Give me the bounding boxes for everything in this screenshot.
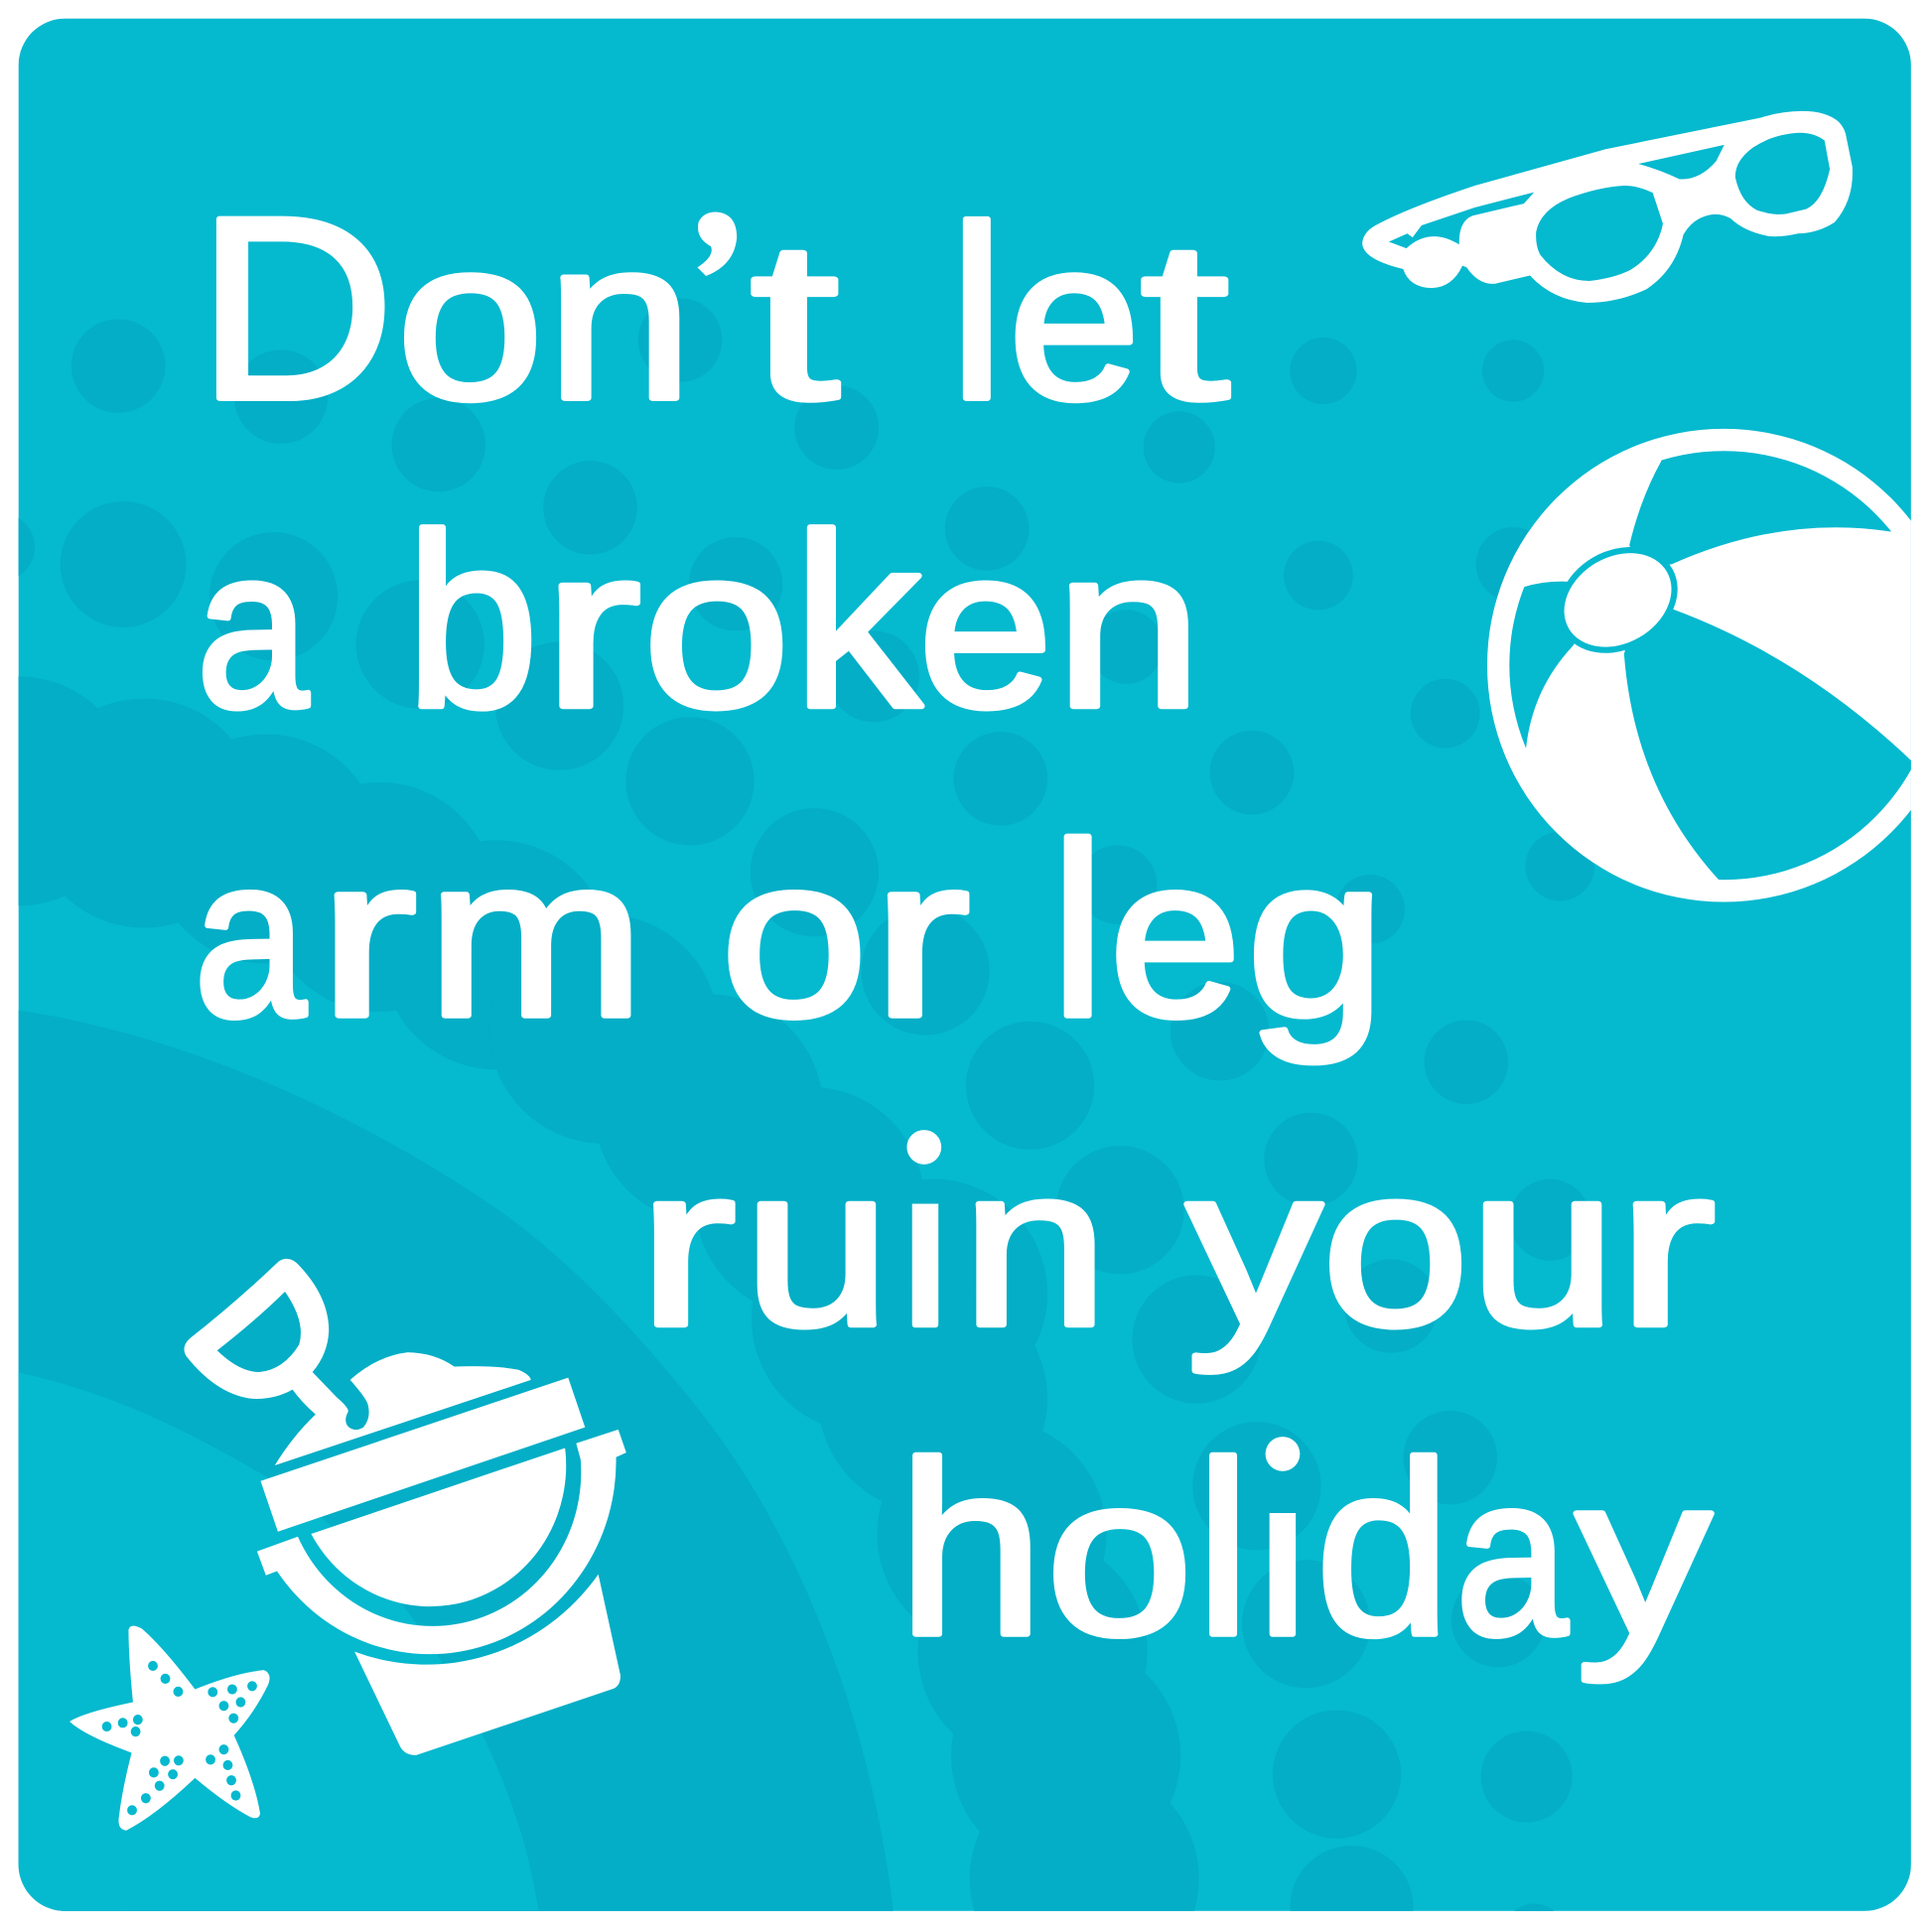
- title line 5: h: [897, 1411, 1044, 1687]
- icon: beach ball: [1487, 429, 1911, 901]
- title line 4: u: [744, 1118, 891, 1373]
- scalloped cloud band: [0, 676, 1199, 1932]
- title line 5: i: [1257, 1411, 1309, 1687]
- background bubbles: [0, 298, 1594, 1932]
- title line 3: o: [721, 809, 868, 1064]
- title line 5: o: [1045, 1428, 1193, 1683]
- title line 2: o: [643, 499, 790, 755]
- inner light arc: [19, 1373, 538, 1912]
- title line 2: e: [918, 499, 1052, 755]
- title line 1: t: [1141, 196, 1229, 446]
- title line 1: n: [546, 192, 693, 447]
- apostrophe shape: [697, 211, 737, 276]
- title line 5: l: [1195, 1411, 1251, 1687]
- dot of i in ruin: [906, 1130, 941, 1165]
- icon: starfish: [69, 1626, 270, 1831]
- title line 5: d: [1315, 1411, 1450, 1687]
- sand inside bucket: [311, 1448, 566, 1606]
- title line 2: b: [406, 483, 538, 759]
- title line 3: r: [319, 809, 417, 1064]
- icon: bucket, spade and sand: [184, 1259, 626, 1755]
- title line 5: y: [1576, 1428, 1712, 1683]
- title line 3: l: [1050, 792, 1105, 1068]
- title line 3: g: [1247, 809, 1385, 1064]
- title line 3: m: [427, 809, 644, 1064]
- title line 3: e: [1109, 809, 1241, 1064]
- title line 4: y: [1186, 1118, 1322, 1373]
- title line 4: r: [1617, 1118, 1716, 1373]
- title line 4: n: [962, 1118, 1108, 1373]
- title line 4: i: [899, 1101, 951, 1377]
- title line 5: a: [1455, 1428, 1568, 1683]
- title line 2: n: [1055, 499, 1202, 755]
- title line 2: a: [197, 499, 309, 755]
- icon: swimming goggles: [1362, 111, 1853, 303]
- title line 2: r: [543, 499, 641, 755]
- title line 1: t: [751, 196, 839, 446]
- dot of i in holiday: [1266, 1437, 1300, 1471]
- bucket base: [354, 1575, 621, 1755]
- title line 2: k: [793, 483, 922, 759]
- title line 4: r: [637, 1118, 737, 1373]
- title line 3: r: [872, 809, 970, 1064]
- title line 1: l: [949, 175, 1004, 451]
- title line 1: e: [1009, 192, 1140, 447]
- title line 1: ’: [707, 204, 727, 300]
- bucket lid: [260, 1378, 585, 1532]
- spade and sand mound: [184, 1259, 531, 1465]
- title line 4: o: [1321, 1118, 1469, 1373]
- bucket rim: [257, 1430, 626, 1654]
- title line 3: a: [195, 809, 306, 1064]
- large dark arc: [19, 1011, 894, 1912]
- title line 1: o: [396, 192, 544, 447]
- title line 1: D: [198, 164, 394, 454]
- title line 4: u: [1469, 1118, 1616, 1373]
